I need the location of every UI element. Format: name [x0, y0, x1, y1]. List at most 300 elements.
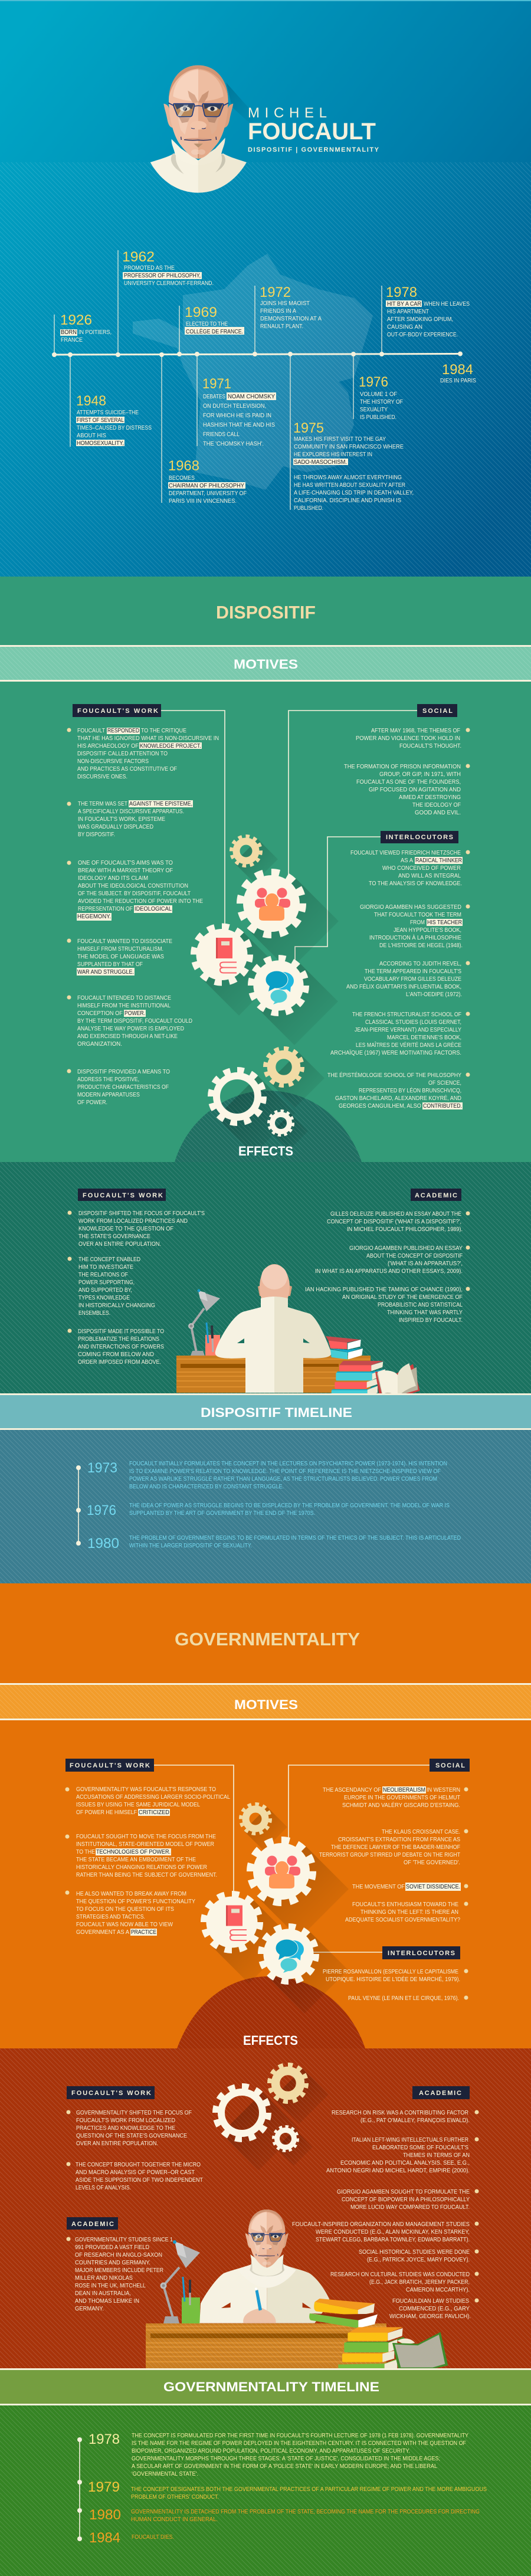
text: foucault's work bullets: HIS ARCHAEOLOGY OF [77, 743, 139, 749]
entry 1976 [87, 1503, 450, 1518]
text: foucault's work bullets: TO THE CRITIQUE [141, 728, 186, 734]
text: social bullets: TERRORIST GROUP STIRRED UP DEBATE ON THE RIGHT [319, 1852, 460, 1858]
text: academic left: OF RESEARCH IN ANGLO-SAXON [75, 2252, 162, 2258]
text: foucault's work effects: COMING FROM BELOW AND [78, 1351, 154, 1358]
text: foucault's work bullets: ABOUT THE IDEOLOGICAL CONSTITUTION [78, 883, 188, 889]
gear shadows [210, 1807, 349, 2014]
entry 1980: THE PROBLEM OF GOVERNMENT BEGINS TO BE FORMULATED IN TERMS OF THE ETHICS OF THE SUBJECT. THIS IS ARTICULATED [129, 1535, 461, 1541]
text: social bullets: THE IDEOLOGY OF [412, 802, 461, 809]
event 1962 [122, 249, 214, 287]
text: foucault's work bullets: IDEOLOGY AND ITS CLAIM [78, 875, 148, 882]
event 1971: FRIENDS CALL [203, 431, 240, 438]
heading: governmentality: GOVERNMENTALITY [175, 1629, 360, 1649]
label: interlocutors [381, 831, 458, 843]
event 1969 [185, 305, 244, 335]
text: interlocutors bullets: ARCHAÏQUE (1967) WERE MOTIVATING FACTORS. [330, 1049, 461, 1056]
event 1926: BORN [61, 329, 77, 336]
text: foucault's work bullets: MODERN APPARATUSES [77, 1092, 140, 1098]
text: interlocutors bullets: JEAN-PIERRE VERNANT) AND ESPECIALLY [355, 1027, 461, 1033]
text: foucault's work effects: PRACTICES AND KNOWLEDGE TO THE [76, 2125, 175, 2132]
text: interlocutors bullets: INTRODUCTION À LA PHILOSOPHIE [369, 934, 461, 941]
text: academic right: GIORGIO AGAMBEN SOUGHT TO FORMULATE THE [337, 2189, 470, 2195]
text: academic right: (E.G., JACK BRATICH, JEREMY PACKER, [369, 2279, 470, 2286]
gear: ring [215, 2086, 268, 2139]
label: interlocutors: INTERLOCUTORS [386, 834, 453, 841]
text: social bullets: SCHMIDT AND VALÉRY GISCARD D'ESTAING. [342, 1801, 460, 1809]
portrait: Foucault's head at the desk [245, 2210, 289, 2267]
title: FOUCAULT [248, 119, 376, 145]
heading: dispositif: DISPOSITIF [216, 602, 316, 623]
text: foucault's work bullets: DISCURSIVE ONES. [77, 774, 127, 780]
text: foucault's work bullets: A SPECIFICALLY DISCURSIVE APPARATUS. [78, 809, 184, 815]
text: foucault's work bullets: DISPOSITIF CALLED ATTENTION TO [77, 751, 168, 757]
text: academic effects: IAN HACKING PUBLISHED THE TAMING OF CHANCE (1990), [305, 1287, 463, 1293]
label: foucault's work [78, 1189, 166, 1201]
event 1976: THE HISTORY OF [360, 399, 403, 405]
text: interlocutors bullets: CLASSICAL STUDIES (LOUIS GERNET, [365, 1019, 461, 1026]
label: foucault's work: FOUCAULT'S WORK [70, 1762, 150, 1769]
event 1975: PUBLISHED. [294, 505, 323, 512]
text: academic left: GOVERNMENTALITY STUDIES SINCE 1 [75, 2237, 173, 2243]
event 1962: 1962 [122, 249, 155, 265]
event 1978: WHEN HE LEAVES [424, 301, 470, 307]
text: academic right: (E.G., PATRICK JOYCE, MARY POOVEY). [367, 2257, 470, 2263]
text: foucault's work bullets: TO FOCUS ON THE QUESTION OF ITS [76, 1906, 174, 1913]
event 1976: 1976 [359, 374, 388, 390]
entry 1978: THE CONCEPT IS FORMULATED FOR THE FIRST TIME IN FOUCAULT'S FOURTH LECTURE OF 1978 (1 FEB 1978). GOVERNMENTALITY [132, 2433, 468, 2439]
map of France [133, 254, 373, 490]
text: foucault's work bullets: IN FOUCAULT'S WORK, EPISTEME [78, 816, 165, 823]
gear: book [194, 927, 250, 983]
event 1968: CHAIRMAN OF PHILOSOPHY [169, 483, 244, 489]
event 1975: 1975 [293, 420, 324, 436]
event 1975: MAKES HIS FIRST VISIT TO THE GAY [294, 436, 386, 443]
text: academic right: ANTONIO NEGRI AND MICHEL HARDT, EMPIRE (2000). [326, 2168, 470, 2174]
text: foucault's work bullets: KNOWLEDGE PROJECT. [140, 743, 201, 749]
text: foucault's work bullets: HIMSELF FROM STRUCTURALISM. [77, 946, 163, 953]
text: academic effects [305, 1211, 470, 1324]
gear: effects ring [211, 1070, 264, 1123]
text: interlocutors bullets: THE ÉPISTÉMOLOGIE SCHOOL OF THE PHILOSOPHY [327, 1071, 461, 1079]
text: interlocutors bullets: GEORGES CANGUILHEM, ALSO [339, 1103, 421, 1109]
event 1971 [202, 376, 276, 447]
title: MICHEL [248, 105, 327, 121]
text: foucault's work effects: ASIDE THE SUPPOSITION OF TWO INDEPENDENT [76, 2177, 203, 2184]
text: foucault's work bullets: BY THE TERM DISPOSITIF, FOUCAULT COULD [77, 1018, 192, 1024]
entry 1973: 1973 [87, 1460, 117, 1476]
text: foucault's work bullets: RESPONDED [107, 728, 139, 734]
gear: people [250, 1840, 313, 1903]
label: academic [411, 1189, 461, 1201]
text: foucault's work bullets: HIMSELF FROM THE INSTITUTIONAL [77, 1003, 171, 1009]
entry 1978: IS THE NAME FOR THE REGIME OF POWER DEPLOYED IN THE EIGHTEENTH CENTURY. IT IS CONNECTED WITH THE QUESTION OF [132, 2440, 466, 2447]
text: foucault's work bullets: AVOIDED THE REDUCTION OF POWER INTO THE [78, 898, 203, 905]
event 1975: COMMUNITY IN SAN FRANCISCO WHERE [294, 444, 404, 450]
event 1968: DEPARTMENT, UNIVERSITY OF [169, 490, 247, 497]
text: social bullets: THE FORMATION OF PRISON INFORMATION [344, 764, 461, 770]
entry 1978: BIOPOWER, ORGANIZED AROUND POPULATION, POLITICAL ECONOMY, AND APPARATUSES OF SECURITY. [132, 2448, 410, 2454]
text: interlocutors bullets: THE TERM APPEARED IN FOUCAULT'S [365, 968, 461, 975]
text: foucault's work bullets: FOUCAULT WANTED TO DISSOCIATE [77, 938, 172, 945]
text: foucault's work bullets: TECHNOLOGIES OF POWER. [96, 1849, 171, 1855]
text: academic left: COUNTRIES AND GERMANY. [75, 2260, 150, 2266]
event 1969: COLLÈGE DE FRANCE. [186, 328, 243, 335]
entry 1973: POWER AS WARLIKE STRUGGLE RATHER THAN LANGUAGE, AS THE STRUCTURALISTS BELIEVED. POWER COMES FROM [129, 1476, 437, 1482]
text: interlocutors bullets: AND FÉLIX GUATTARI'S INFLUENTIAL BOOK, [346, 983, 461, 990]
text: foucault's work bullets: ADDRESS THE POSITIVE, [77, 1076, 139, 1083]
text: foucault's work bullets: ISSUES BY USING THE SAME JURIDICAL MODEL [76, 1802, 200, 1808]
entry 1979: THE CONCEPT DESIGNATES BOTH THE GOVERNMENTAL PRACTICES OF A PARTICULAR REGIME OF POWER AND THE MORE AMBIGUOUS [131, 2486, 487, 2493]
text: foucault's work effects: ORDER IMPOSED FROM ABOVE. [78, 1359, 161, 1366]
text: foucault's work bullets: CRITICIZED [139, 1809, 169, 1816]
entry 1980: 1980 [87, 1536, 119, 1552]
event 1926: FRANCE [61, 337, 83, 343]
text: academic effects: CONCEPT OF DISPOSITIF ('WHAT IS A DISPOSITIF?', [327, 1219, 461, 1225]
gear: book [204, 1894, 260, 1950]
event 1978: CAUSING AN [387, 324, 422, 330]
text: foucault's work bullets: GOVERNMENT AS A [76, 1929, 129, 1936]
event 1971: HASHISH THAT HE AND HIS [203, 422, 275, 428]
text: interlocutors bullets: TO THE ANALYSIS OF KNOWLEDGE. [369, 881, 462, 887]
entry 1973: FOUCAULT INITIALLY FORMULATES THE CONCEPT IN THE LECTURES ON PSYCHIATRIC POWER (1973-1974). HIS INTENTION [129, 1461, 447, 1467]
text: social bullets: AFTER MAY 1968, THE THEMES OF [371, 728, 460, 734]
entry 1973: BELOW AND IS CHARACTERIZED BY CONSTANT STRUGGLE. [129, 1484, 284, 1490]
panel: governmentality timeline [0, 2368, 531, 2576]
gear: small top [231, 836, 261, 866]
gear: people [240, 872, 303, 935]
text: social bullets: NEOLIBERALISM [383, 1787, 425, 1793]
text: interlocutors bullets: GASTON BACHELARD, ALEXANDRE KOYRÉ, AND [335, 1094, 461, 1102]
event 1969: ELECTED TO THE [186, 321, 228, 328]
event 1969: 1969 [185, 305, 217, 320]
text: social bullets: AIMED AT DESTROYING [399, 794, 461, 801]
band: governmentality timeline heading: GOVERNMENTALITY TIMELINE [163, 2379, 379, 2394]
text: interlocutors bullets: ACCORDING TO JUDITH REVEL, [379, 961, 461, 967]
entry 1984 [89, 2530, 174, 2546]
text: foucault's work effects: WORK FROM LOCALIZED PRACTICES AND [78, 1218, 188, 1225]
event 1978: HIT BY A CAR [387, 301, 421, 307]
text: interlocutors bullets: FOUCAULT VIEWED FRIEDRICH NIETZSCHE [350, 850, 461, 856]
event 1968: BECOMES [169, 475, 195, 482]
illustration: Foucault from behind [215, 1264, 332, 1393]
text: interlocutors bullets [323, 1969, 468, 2002]
event 1962: UNIVERSITY CLERMONT-FERRAND. [124, 280, 214, 287]
panel: governmentality motives [0, 1583, 531, 2048]
text: foucault's work effects: THE RELATIONS OF [78, 1272, 128, 1278]
gear: small [273, 2126, 298, 2151]
text: interlocutors bullets: FROM [410, 919, 425, 926]
text: foucault's work bullets: STRATEGIES AND TACTICS. [76, 1914, 145, 1920]
text: foucault's work effects [66, 2110, 203, 2191]
text: foucault's work effects: AND MACRO ANALYSIS OF POWER–OR CAST [76, 2169, 195, 2176]
event 1975 [293, 420, 414, 512]
gear shadows [221, 2068, 329, 2171]
text: foucault's work bullets: AGAINST THE EPISTEME, [129, 801, 192, 807]
label: effects: EFFECTS [243, 2033, 298, 2048]
event 1978 [386, 284, 470, 338]
gear: tan [269, 2064, 307, 2102]
text: social bullets: POWER AND VIOLENCE TOOK HOLD IN [356, 735, 460, 742]
text: foucault's work effects: AND INTERACTIONS OF POWERS [78, 1344, 164, 1350]
text: foucault's work effects: PROBLEMATIZE THE RELATIONS [78, 1336, 159, 1343]
entry 1978: A SECULAR ART OF GOVERNMENT IN THE FORM OF A 'POLICE STATE' IN EARLY MODERN EUROPE; AND THE LIBERAL [132, 2463, 437, 2470]
timeline axis [52, 250, 463, 510]
event 1984 [440, 362, 476, 384]
text: interlocutors bullets: THE FRENCH STRUCTURALIST SCHOOL OF [352, 1012, 461, 1018]
illustration: book stacks [309, 2299, 448, 2368]
text: foucault's work effects: OVER AN ENTIRE POPULATION. [78, 1241, 161, 1248]
entry 1978: 'GOVERNMENTAL STATE'. [132, 2471, 198, 2477]
text: foucault's work effects: DISPOSITIF SHIFTED THE FOCUS OF FOUCAULT'S [78, 1210, 205, 1217]
text: academic effects: THINKING THAT WAS PARTLY [387, 1310, 463, 1316]
text: academic left: MILLER AND NIKOLAS [75, 2275, 133, 2282]
text: foucault's work bullets [67, 728, 219, 1106]
panel: governmentality effects [0, 2048, 531, 2368]
event 1968: PARIS VIII IN VINCENNES. [169, 498, 237, 505]
text: social bullets: THE KLAUS CROISSANT CASE. [382, 1829, 460, 1835]
band: dispositif timeline heading [0, 1393, 531, 1430]
text: foucault's work bullets: TO THE [76, 1849, 95, 1855]
text: academic effects: IN WHAT IS AN APPARATUS AND OTHER ESSAYS, 2009). [315, 1268, 463, 1275]
text: interlocutors bullets: L'ANTI-OEDIPE (1972). [406, 991, 462, 998]
text: academic right: CAMERON MCCARTHY). [406, 2287, 470, 2293]
event 1971: NOAM CHOMSKY [228, 394, 275, 400]
text: academic right: THEMES IN TERMS OF AN [403, 2152, 470, 2159]
event 1972: 1972 [260, 284, 291, 300]
entry 1979: 1979 [88, 2479, 120, 2495]
title [248, 105, 379, 153]
text: foucault's work bullets: BREAK WITH A MARXIST THEORY OF [78, 868, 173, 874]
text: foucault's work bullets: ONE OF FOUCAULT'S AIMS WAS TO [78, 860, 173, 866]
label: foucault's work: FOUCAULT'S WORK [77, 708, 158, 715]
label: social: SOCIAL [435, 1762, 465, 1769]
event 1971: DEBATES [203, 394, 225, 400]
text: foucault's work bullets: OF THE SUBJECT. BY DISPOSITIF, FOUCAULT [78, 891, 191, 897]
text: foucault's work effects: POWER SUPPORTING, [78, 1279, 135, 1286]
illustration: desk [146, 2323, 386, 2368]
text: social bullets: GOOD AND EVIL. [415, 810, 461, 816]
text: social bullets: OF 'THE GOVERNED'. [404, 1860, 460, 1866]
text: foucault's work effects: THE CONCEPT BROUGHT TOGETHER THE MICRO [76, 2162, 201, 2168]
hill: effects [177, 1976, 365, 2048]
event 1976: IS PUBLISHED. [360, 414, 396, 421]
text: interlocutors bullets: MARCEL DETIENNE'S BOOK, [387, 1035, 461, 1041]
text: academic right: CONCEPT OF BIOPOWER IN A PHILOSOPHICALLY [342, 2197, 470, 2203]
text: foucault's work bullets: WAS GRADUALLY DISPLACED [78, 824, 153, 830]
band: dispositif timeline heading: DISPOSITIF TIMELINE [201, 1405, 352, 1420]
event 1975: A LIFE-CHANGING LSD TRIP IN DEATH VALLEY, [294, 490, 414, 496]
timeline spine [77, 2437, 82, 2541]
gear: small top [241, 1804, 270, 1834]
gear: chat [261, 1926, 316, 1982]
text: social bullets [319, 1786, 468, 1923]
gear: effects small [268, 1111, 293, 1135]
event 1978: HIS APARTMENT [387, 309, 429, 315]
illustration: Foucault at the desk [199, 2254, 330, 2323]
entry 1980: 1980 [89, 2507, 121, 2523]
text: foucault's work bullets: FOUCAULT WAS NOW ABLE TO VIEW [76, 1922, 173, 1928]
text: foucault's work bullets: ANALYSE THE WAY POWER IS EMPLOYED [77, 1026, 184, 1032]
label: academic right [412, 2086, 470, 2099]
entry 1976: SUPPLANTED BY THE ART OF GOVERNMENT BY THE END OF THE 1970S. [129, 1510, 315, 1517]
text: academic effects: INSPIRED BY FOUCAULT. [399, 1317, 463, 1324]
text: social bullets: SOVIET DISSIDENCE. [406, 1884, 460, 1890]
text: foucault's work bullets: GOVERNMENTALITY WAS FOUCAULT'S RESPONSE TO [76, 1786, 216, 1793]
text: academic effects: AN ORIGINAL STUDY OF THE EMERGENCE OF [342, 1294, 463, 1301]
text: academic left: DEAN IN AUSTRALIA, [75, 2290, 131, 2297]
text: academic effects: IN MICHEL FOUCAULT PHILOSOPHER, 1989). [347, 1226, 463, 1233]
text: foucault's work bullets: OF POWER. [77, 1099, 107, 1106]
text: academic right [292, 2110, 479, 2320]
entry 1973 [87, 1460, 447, 1490]
text: academic effects: PROBABILISTIC AND STATISTICAL [378, 1302, 463, 1308]
text: foucault's work effects: LEVELS OF ANALYSIS. [76, 2185, 131, 2191]
text: interlocutors bullets: THAT FOUCAULT TOOK THE TERM [374, 912, 461, 918]
band: governmentality timeline heading [0, 2368, 531, 2405]
panel: dispositif effects [0, 1162, 531, 1399]
entry 1980 [89, 2507, 480, 2523]
event 1948 [76, 393, 152, 447]
band: motives [0, 645, 531, 682]
connector lines [161, 711, 417, 962]
text: academic left: GERMANY. [75, 2306, 104, 2312]
event 1972: JOINS HIS MAOIST [260, 300, 310, 307]
event 1984: 1984 [442, 362, 473, 378]
text: academic right: FOUCAULT-INSPIRED ORGANIZATION AND MANAGEMENT STUDIES [292, 2221, 470, 2228]
event 1972: FRIENDS IN A [260, 308, 296, 315]
text: foucault's work bullets: CONCEPTION OF [77, 1010, 123, 1017]
text: social bullets: THE MOVEMENT OF [352, 1884, 405, 1890]
label: academic left: ACADEMIC [71, 2221, 114, 2228]
event 1971: THE 'CHOMSKY HASH'. [203, 441, 264, 447]
event 1976: SEXUALITY [360, 407, 388, 413]
text: academic effects: ('WHAT IS AN APPARATUS?', [388, 1261, 463, 1267]
event 1978: 1978 [386, 284, 417, 300]
text: foucault's work bullets: THAT HE HAS IGNORED WHAT IS NON-DISCURSIVE IN [77, 735, 219, 742]
text: foucault's work bullets: IDEOLOGICAL [135, 906, 172, 912]
text: interlocutors bullets: HIS TEACHER [427, 919, 462, 926]
text: foucault's work bullets: NON-DISCURSIVE FACTORS [77, 758, 149, 765]
text: foucault's work bullets [65, 1786, 230, 1936]
text: interlocutors bullets: PIERRE ROSANVALLON (ESPECIALLY LE CAPITALISME [323, 1969, 458, 1975]
gear: effects tan [266, 1048, 302, 1086]
text: foucault's work bullets: THE TERM WAS SET [78, 801, 127, 807]
text: foucault's work bullets: WAR AND STRUGGLE. [77, 969, 134, 976]
text: foucault's work bullets: ACCUSATIONS OF ADDRESSING LARGER SOCIO-POLITICAL [76, 1794, 230, 1801]
entry 1978: 1978 [88, 2431, 120, 2447]
text: foucault's work bullets: FOUCAULT SOUGHT TO MOVE THE FOCUS FROM THE [76, 1834, 216, 1840]
text: social bullets: IN WESTERN [427, 1787, 460, 1793]
text: foucault's work effects [67, 1210, 205, 1366]
text: interlocutors bullets: LES MAÎTRES DE VÉRITÉ DANS LA GRÈCE [356, 1041, 461, 1049]
text: interlocutors bullets: DE L'HISTOIRE DE HEGEL (1948). [379, 942, 463, 949]
text: social bullets: ADEQUATE SOCIALIST GOVERNMENTALITY? [345, 1917, 460, 1923]
text: foucault's work bullets: PRACTICE [131, 1929, 156, 1936]
label: academic right: ACADEMIC [419, 2090, 461, 2097]
text: foucault's work bullets: POWER. [124, 1010, 145, 1017]
text: interlocutors bullets [327, 850, 470, 1109]
text: interlocutors bullets: OF SCIENCE, [428, 1080, 461, 1086]
illustration: desk [176, 1356, 371, 1393]
text: academic left [66, 2237, 173, 2312]
text: academic right: WICKHAM, GEORGE PAVLICH). [389, 2313, 471, 2320]
text: foucault's work bullets: HE ALSO WANTED TO BREAK AWAY FROM [76, 1891, 186, 1897]
event 1975: CALIFORNIA. DISCIPLINE AND PUNISH IS [294, 497, 401, 504]
text: foucault's work bullets: HISTORICALLY CHANGING RELATIONS OF POWER [76, 1864, 207, 1871]
event 1972 [260, 284, 322, 330]
text: academic right: COMMENCED (E.G., GARY [399, 2306, 470, 2312]
text: interlocutors bullets: JEAN HYPPOLITE'S BOOK, [394, 927, 461, 934]
text: social bullets: THE ASCENDANCY OF [323, 1787, 381, 1793]
event 1975: HE EXPLORES HIS INTEREST IN [294, 451, 372, 458]
event 1962: PROMOTED AS THE [124, 265, 175, 271]
text: social bullets: FOUCAULT'S THOUGHT. [399, 743, 461, 749]
event 1948: TIMES–CAUSED BY DISTRESS [77, 425, 152, 431]
text: social bullets: THINKING ON THE LEFT: IS THERE AN [360, 1909, 458, 1916]
text: foucault's work effects: KNOWLEDGE TO THE QUESTION OF [78, 1226, 173, 1232]
text: social bullets: FOUCAULT'S ENTHUSIASM TOWARD THE [352, 1901, 458, 1908]
panel: dispositif timeline [0, 1393, 531, 1583]
event 1926: 1926 [60, 312, 92, 328]
text: social bullets: FOUCAULT AS ONE OF THE FOUNDERS, [356, 779, 461, 785]
event 1976 [359, 374, 403, 421]
text: social bullets: THE DEFENCE LAWYER OF THE BAADER-MEINHOF [331, 1844, 460, 1851]
event 1971: 1971 [202, 376, 231, 392]
text: interlocutors bullets: AS A [401, 857, 413, 864]
text: academic left: MAJOR MEMBERS INCLUDE PETER [75, 2267, 163, 2274]
text: social bullets: EUROPE IN THE GOVERNMENTS OF HELMUT [344, 1795, 460, 1801]
entry 1984: 1984 [89, 2530, 120, 2546]
event 1978: AFTER SMOKING OPIUM, [387, 316, 453, 323]
event 1948: HOMOSEXUALITY, [77, 440, 124, 447]
event 1971: FOR WHICH HE IS PAID IN [203, 413, 271, 419]
label: academic: ACADEMIC [415, 1192, 457, 1199]
event 1948: ABOUT HIS [77, 433, 106, 439]
text: interlocutors bullets: WHO CONCEIVED OF POWER [382, 865, 461, 872]
text: interlocutors bullets: CONTRIBUTED. [423, 1103, 462, 1109]
event 1975: HE THROWS AWAY ALMOST EVERYTHING [294, 474, 402, 481]
text: interlocutors bullets: UTOPIQUE. HISTOIRE DE L'IDÉE DE MARCHÉ, 1979). [326, 1975, 460, 1983]
text: academic right: ECONOMIC AND POLITICAL ANALYSIS. SEE, E.G., [340, 2160, 470, 2166]
label: foucault's work [67, 2086, 155, 2099]
event 1926 [60, 312, 112, 343]
text: interlocutors bullets: PAUL VEYNE (LE PAIN ET LE CIRQUE, 1976). [348, 1995, 459, 2002]
label: foucault's work [65, 1759, 154, 1772]
event 1972: RENAULT PLANT. [260, 323, 303, 330]
entry 1976: THE IDEA OF POWER AS STRUGGLE BEGINS TO BE DISPLACED BY THE PROBLEM OF GOVERNMENT. THE MODEL OF WAR IS [129, 1503, 450, 1509]
label: foucault's work: FOUCAULT'S WORK [71, 2090, 151, 2097]
text: academic right: ITALIAN LEFT-WING INTELLECTUALS FURTHER [352, 2137, 468, 2143]
label: social [430, 1759, 470, 1772]
event 1968 [168, 458, 247, 505]
text: foucault's work effects: FOUCAULT'S WORK FROM LOCALIZED [76, 2117, 175, 2124]
text: foucault's work bullets: SUPPLANTED BY THAT OF [77, 961, 143, 968]
text: foucault's work bullets: OF POWER HE HIMSELF [76, 1809, 137, 1816]
event 1975: SADO-MASOCHISM. [294, 459, 347, 466]
band: motives: MOTIVES [234, 657, 298, 672]
text: academic effects: GILLES DELEUZE PUBLISHED AN ESSAY ABOUT THE [330, 1211, 461, 1217]
entry 1976: 1976 [87, 1503, 116, 1518]
label: interlocutors [382, 1946, 460, 1959]
text: academic left: ROSE IN THE UK, MITCHELL [75, 2283, 146, 2289]
text: foucault's work effects: DISPOSITIF MADE IT POSSIBLE TO [78, 1328, 164, 1335]
entry 1980: WITHIN THE LARGER DISPOSITIF OF SEXUALITY. [129, 1543, 252, 1549]
text: foucault's work bullets: AND EXERCISED THROUGH A NET-LIKE [77, 1033, 178, 1040]
entry 1978 [88, 2431, 468, 2477]
text: foucault's work effects: TYPES KNOWLEDGE [78, 1295, 130, 1301]
gear shadows [200, 839, 339, 1154]
label: effects: EFFECTS [238, 1144, 293, 1158]
